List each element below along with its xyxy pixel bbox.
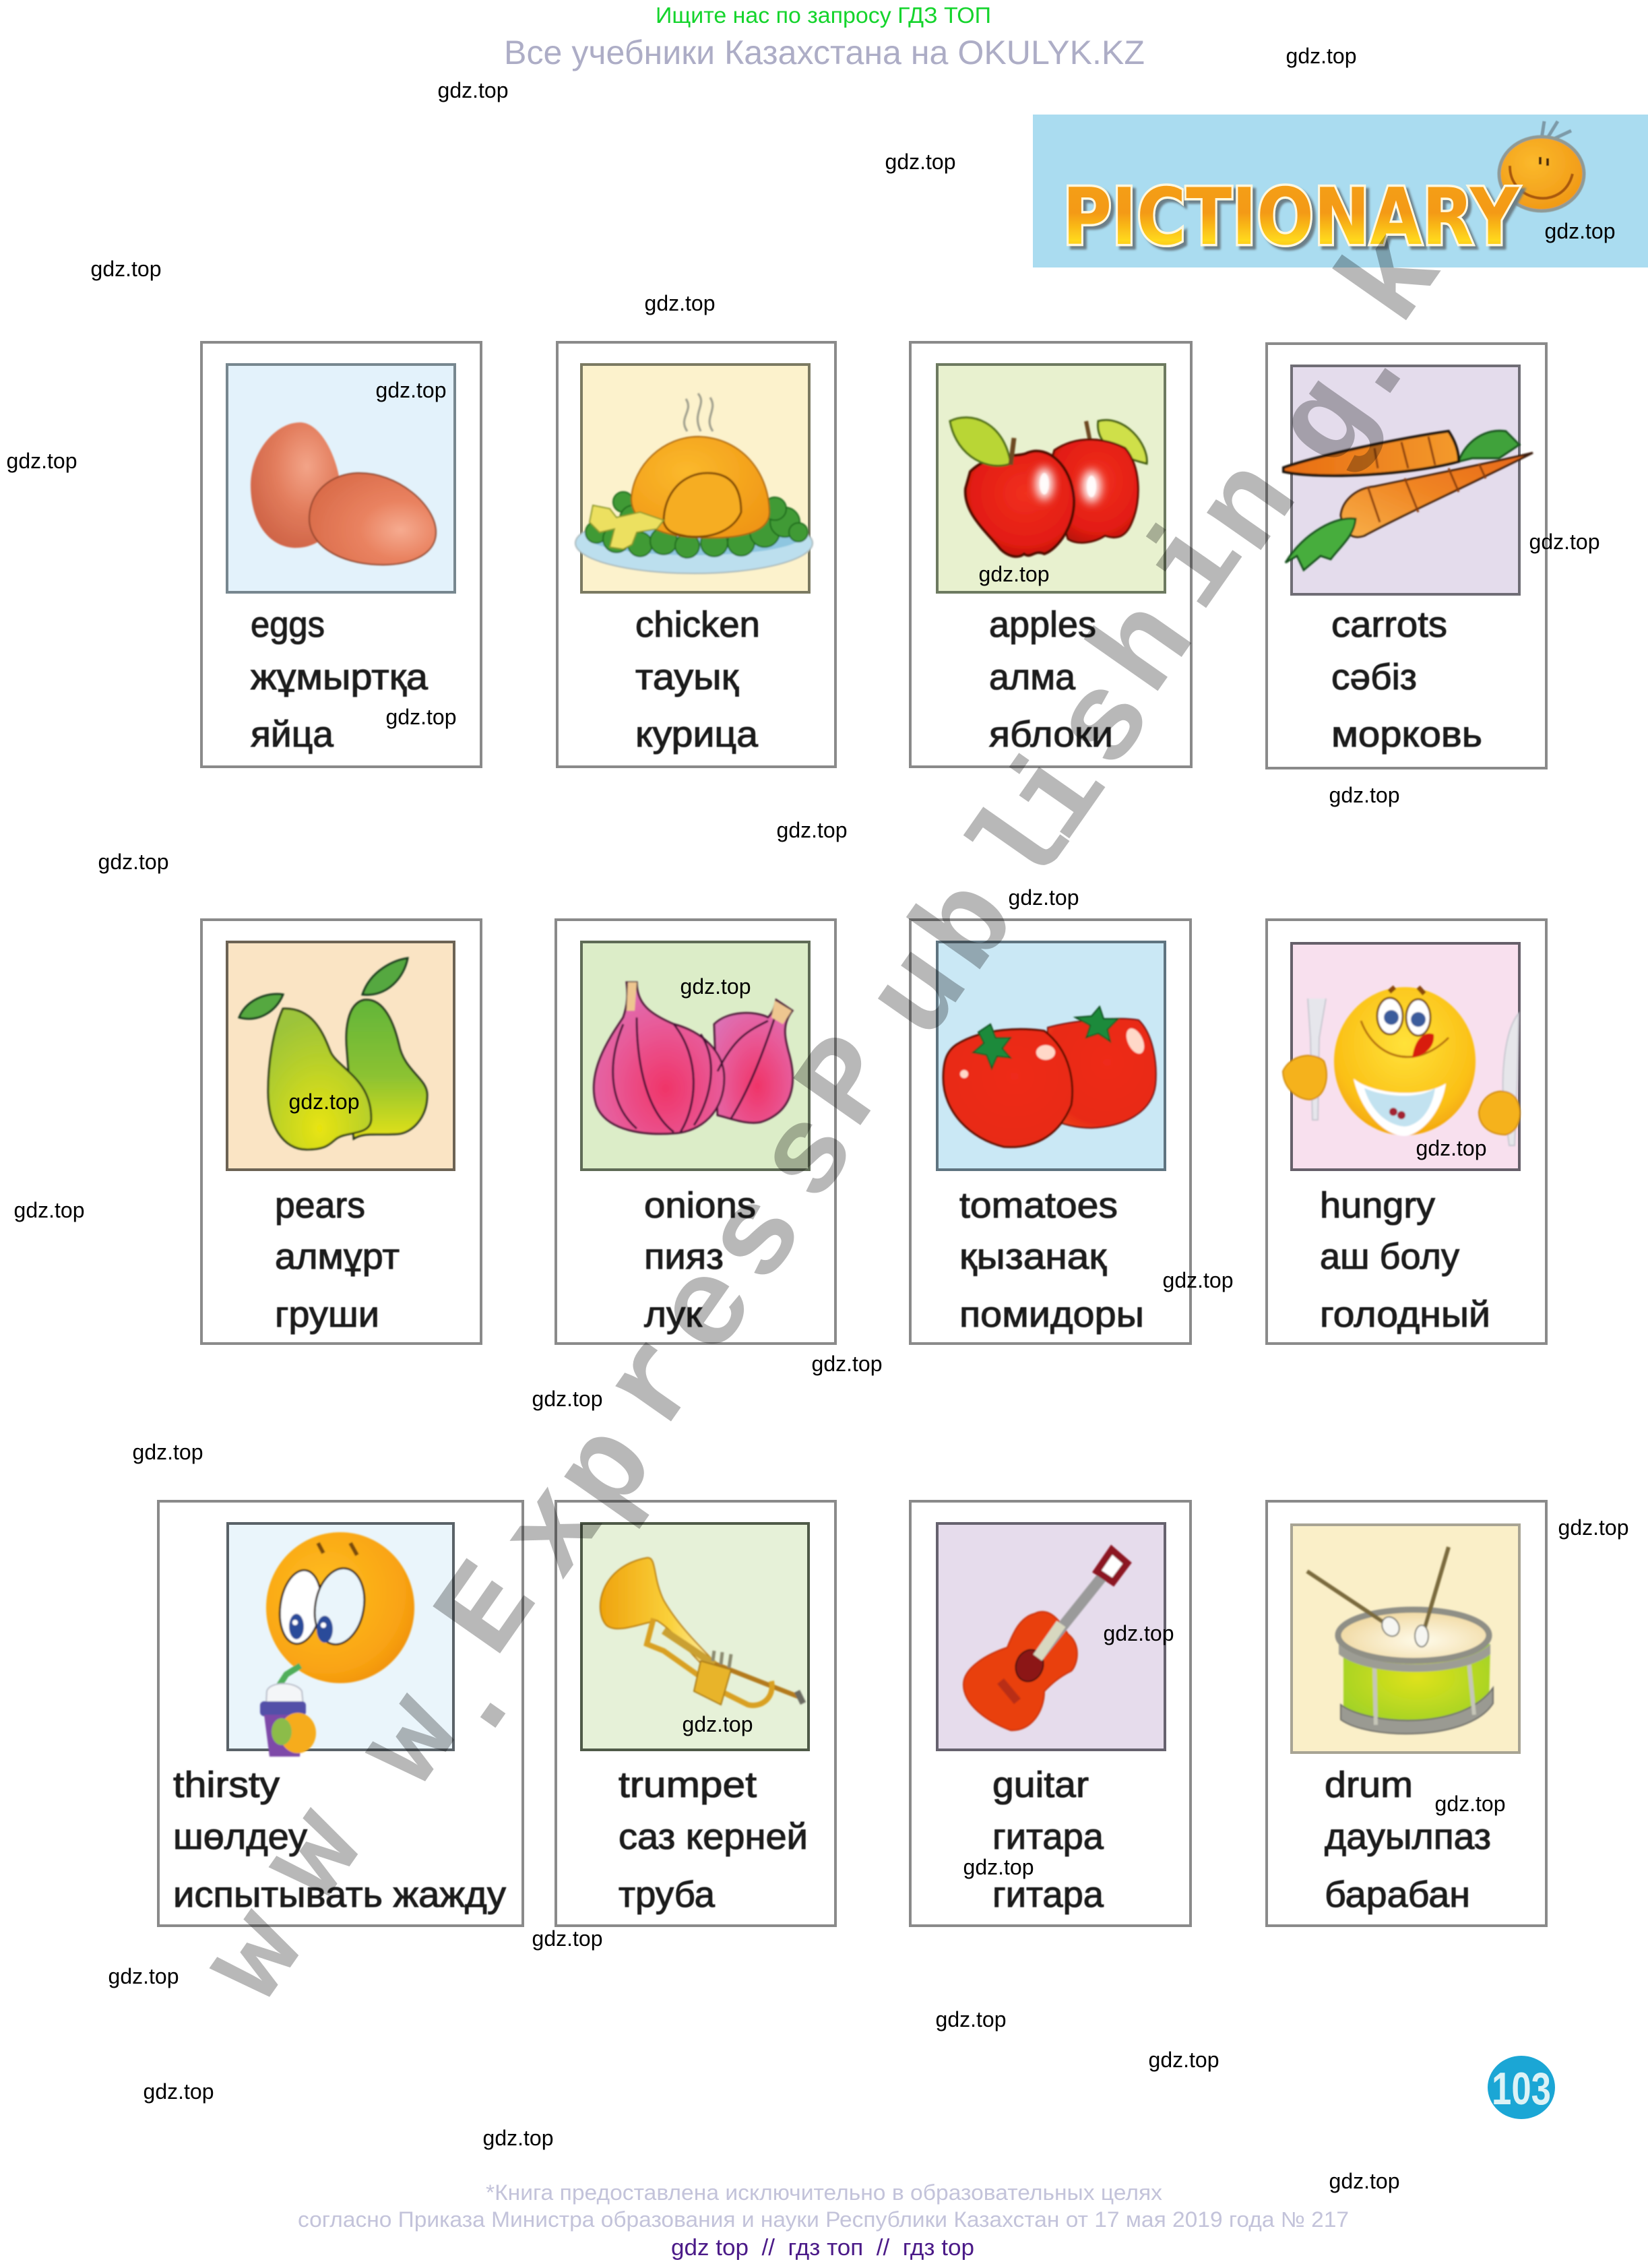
illustration: guitar — [963, 1550, 1127, 1730]
word list: carrots: морковь — [1331, 714, 1482, 755]
card: onions — [556, 920, 835, 1344]
gdz.top stamps: gdz.top — [1163, 1268, 1233, 1292]
gdz.top stamps: gdz.top — [979, 562, 1049, 586]
word list: onions: лук — [644, 1294, 702, 1335]
word list: thirsty: испытывать жажду — [173, 1875, 506, 1915]
gdz.top stamps: gdz.top — [885, 150, 955, 174]
illustration: onions — [594, 982, 793, 1134]
word list: tomatoes: помидоры — [959, 1294, 1144, 1335]
word list: apples: яблоки — [989, 714, 1113, 755]
gdz.top stamps: gdz.top — [936, 2007, 1006, 2031]
gdz.top stamps: gdz.top — [91, 257, 161, 281]
watermark: www.ExpressPublishing.k — [178, 208, 1474, 2028]
gdz.top stamps: gdz.top — [1104, 1621, 1174, 1645]
word list: tomatoes — [959, 1185, 1144, 1335]
illustration: pears — [239, 958, 427, 1149]
illustration: eggs — [251, 422, 436, 565]
word list: chicken: chicken — [635, 604, 760, 645]
word list: thirsty — [173, 1765, 506, 1915]
gdz.top stamps: gdz.top — [1149, 2048, 1219, 2072]
word list: trumpet: саз керней — [619, 1817, 808, 1857]
gdz.top stamps: gdz.top — [438, 78, 508, 102]
gdz.top stamps: gdz.top — [1329, 2169, 1399, 2193]
gdz.top stamps: gdz.top — [144, 2079, 214, 2104]
word list: apples — [989, 604, 1113, 755]
card: apples — [910, 342, 1191, 767]
gdz.top stamps: gdz.top — [777, 818, 847, 842]
footer links: gdz top // гдз топ // гдз top — [671, 2235, 974, 2261]
word list: guitar: гитара — [992, 1875, 1104, 1915]
gdz.top stamps: gdz.top — [680, 974, 751, 999]
card: tomatoes — [910, 920, 1191, 1344]
word list: trumpet: труба — [619, 1875, 716, 1915]
gdz.top stamps: gdz.top — [683, 1712, 753, 1736]
footer note: *Книга предоставлена исключительно в образовательных целях — [486, 2180, 1162, 2205]
word list: tomatoes: қызанақ — [959, 1236, 1106, 1277]
card: chicken — [557, 342, 835, 767]
word list: chicken: тауық — [635, 657, 738, 697]
word list: hungry — [1320, 1185, 1490, 1335]
word list: guitar: guitar — [992, 1765, 1089, 1805]
search prompt line: Ищите нас по запросу ГДЗ ТОП — [656, 3, 991, 28]
word list: pears: груши — [275, 1294, 379, 1335]
card: trumpet — [556, 1501, 835, 1926]
gdz.top stamps: gdz.top — [1558, 1515, 1628, 1540]
illustration: hungry smiley — [1283, 987, 1520, 1145]
gdz.top stamps: gdz.top — [289, 1090, 359, 1114]
word list: apples: алма — [989, 657, 1076, 697]
illustration: carrots — [1283, 431, 1533, 570]
card: pears — [201, 920, 481, 1344]
gdz.top stamps: gdz.top — [1286, 44, 1356, 68]
gdz.top stamps: gdz.top — [98, 850, 168, 874]
gdz.top stamps: gdz.top — [963, 1855, 1034, 1879]
word list: thirsty: шөлдеу — [173, 1817, 307, 1857]
gdz.top stamps: gdz.top — [133, 1440, 203, 1464]
word list: drum: барабан — [1325, 1875, 1470, 1915]
icon: smiley — [1499, 121, 1584, 211]
word list: pears: алмұрт — [275, 1236, 400, 1277]
gdz.top stamps: gdz.top — [532, 1926, 602, 1951]
word list: chicken: курица — [635, 714, 759, 755]
word list: guitar: гитара — [992, 1817, 1104, 1857]
gdz.top stamps: gdz.top — [1009, 885, 1079, 910]
card: guitar — [910, 1501, 1191, 1926]
word list: tomatoes: tomatoes — [959, 1185, 1118, 1226]
gdz.top stamps: gdz.top — [14, 1198, 84, 1222]
illustration: drum — [1307, 1547, 1493, 1734]
gdz.top stamps: gdz.top — [645, 291, 715, 315]
gdz.top stamps: gdz.top — [1416, 1136, 1486, 1160]
word list: drum: drum — [1325, 1765, 1413, 1805]
gdz.top stamps: gdz.top — [532, 1387, 602, 1411]
footer note: согласно Приказа Министра образования и науки Республики Казахстан от 17 мая 2019 года № 217 — [298, 2207, 1349, 2232]
word list: apples: apples — [989, 604, 1096, 645]
illustration: apples — [950, 418, 1147, 557]
word list: drum: дауылпаз — [1325, 1817, 1491, 1857]
word list: trumpet: trumpet — [619, 1765, 757, 1805]
page number badge: 103 — [1492, 2063, 1551, 2114]
word list: carrots: сәбіз — [1331, 657, 1417, 697]
word list: eggs: eggs — [251, 604, 325, 645]
word list: eggs — [251, 604, 429, 755]
gdz.top stamps: gdz.top — [108, 1964, 179, 1988]
illustration: roast chicken — [575, 393, 813, 573]
word list: eggs: яйца — [251, 714, 334, 755]
gdz.top stamps: gdz.top — [1545, 219, 1615, 243]
word list: carrots: carrots — [1331, 604, 1447, 645]
banner: pictionary — [1033, 115, 1648, 267]
word list: hungry: hungry — [1320, 1185, 1435, 1226]
word list: pears: pears — [275, 1185, 365, 1226]
word list: trumpet — [619, 1765, 808, 1915]
card: eggs — [201, 342, 481, 767]
word list: pears — [275, 1185, 400, 1335]
illustration: thirsty smiley — [260, 1532, 414, 1757]
word list: guitar — [992, 1765, 1104, 1915]
word list: hungry: голодный — [1320, 1294, 1490, 1335]
gdz.top stamps: gdz.top — [483, 2126, 553, 2150]
gdz.top stamps: gdz.top — [1529, 530, 1599, 554]
banner title: PICTIONARY — [1063, 172, 1520, 263]
gdz.top stamps: gdz.top — [812, 1352, 882, 1376]
site heading: Все учебники Казахстана на OKULYK.KZ — [504, 34, 1145, 71]
word list: chicken — [635, 604, 760, 755]
card: thirsty — [158, 1501, 523, 1926]
illustration: tomatoes — [943, 1007, 1156, 1147]
word list: onions: onions — [644, 1185, 756, 1226]
gdz.top stamps: gdz.top — [1435, 1792, 1505, 1816]
illustration: trumpet — [600, 1558, 803, 1705]
gdz.top stamps: gdz.top — [7, 449, 77, 473]
card: carrots — [1267, 344, 1546, 768]
gdz.top stamps: gdz.top — [1329, 783, 1399, 807]
word list: carrots — [1331, 604, 1482, 755]
word list: thirsty: thirsty — [173, 1765, 280, 1805]
page number badge — [1488, 2056, 1555, 2119]
card: drum — [1267, 1501, 1546, 1926]
footer note — [298, 2180, 1349, 2232]
word list: drum — [1325, 1765, 1491, 1915]
word list: onions — [644, 1185, 756, 1335]
word list: eggs: жұмыртқа — [251, 657, 429, 697]
gdz.top stamps: gdz.top — [386, 705, 456, 729]
card: hungry — [1267, 920, 1546, 1344]
word list: onions: пияз — [644, 1236, 724, 1277]
gdz.top stamps: gdz.top — [376, 378, 446, 402]
word list: hungry: аш болу — [1320, 1236, 1459, 1277]
